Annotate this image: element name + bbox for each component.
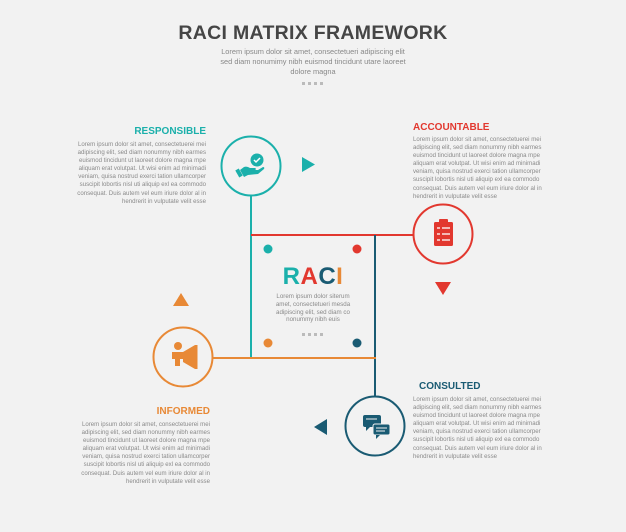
corner dots: [264, 244, 272, 254]
panel: accountable: ACCOUNTABLE: [413, 122, 489, 133]
panel: responsible: Lorem ipsum dolor sit amet, consectetuerei mei adipiscing elit, sed diam nonummy nibh earmes euismod tincidunt ut laoreet dolore magna mpe aliquam erat volutpat. Ut wisi enim ad minimadi veniam, quisa nostrud exerci tation ullamcorper suscipit lobortis nisl uti aliquip exl ea commodo consequat. Duis autem vel eum iriure dolor al in hendrerit in vulputate velit esse: [77, 141, 206, 205]
icon: consulted: [346, 396, 404, 456]
subtitle: Lorem ipsum dolor sit amet, consectetueri adipiscing elit sed diam nonumimy nibh euismod tincidunt utare laoreet dolore magna: [220, 47, 406, 76]
center dots: [302, 333, 323, 336]
header dots: [302, 82, 323, 85]
arrow: dark left: [314, 419, 327, 435]
title: RACI MATRIX FRAMEWORK: [178, 22, 448, 44]
panel: informed: INFORMED: [157, 406, 210, 417]
icon: informed: [154, 328, 212, 386]
arrow: orange up: [173, 293, 189, 306]
panel: accountable: Lorem ipsum dolor sit amet, consectetuerei mei adipiscing elit, sed diam nonummy nibh earmes euismod tincidunt ut laoreet dolore magna mpe aliquam erat volutpat. Ut wisi enim ad minimadi veniam, quisa nostrud exerci tation ullamcorper suscipit lobortis nisl uti aliquip exl ea commodo consequat. Duis autem vel eum iriure dolor al in hendrerit in vulputate velit esse: [413, 136, 542, 200]
center text: Lorem ipsum dolor siterum amet, consectetueri mesda adipiscing elit, sed diam co nonummy nibh euis: [276, 293, 350, 323]
RACI heading: RACI: [283, 263, 343, 290]
arrow: teal right: [302, 157, 315, 172]
connector lines: [212, 196, 414, 397]
arrow: red down: [435, 282, 451, 295]
panel: consulted: CONSULTED: [419, 381, 480, 392]
panel: informed: Lorem ipsum dolor sit amet, consectetuerei mei adipiscing elit, sed diam nonummy nibh earmes euismod tincidunt ut laoreet dolore magna mpe aliquam erat volutpat. Ut wisi enim ad minimadi veniam, quisa nostrud exerci tation ullamcorper suscipit lobortis nisl uti aliquip exl ea commodo consequat. Duis autem vel eum iriure dolor al in hendrerit in vulputate velit esse: [81, 421, 210, 485]
icon: responsible: [222, 136, 280, 196]
panel: responsible: RESPONSIBLE: [134, 126, 206, 137]
panel: consulted: Lorem ipsum dolor sit amet, consectetuerei mei adipiscing elit, sed diam nonummy nibh earmes euismod tincidunt ut laoreet dolore magna mpe aliquam erat volutpat. Ut wisi enim ad minimadi veniam, quisa nostrud exerci tation ullamcorper suscipit lobortis nisl uti aliquip exl ea commodo consequat. Duis autem vel eum iriure dolor al in hendrerit in vulputate velit esse: [413, 396, 542, 460]
icon: accountable: [414, 204, 472, 264]
